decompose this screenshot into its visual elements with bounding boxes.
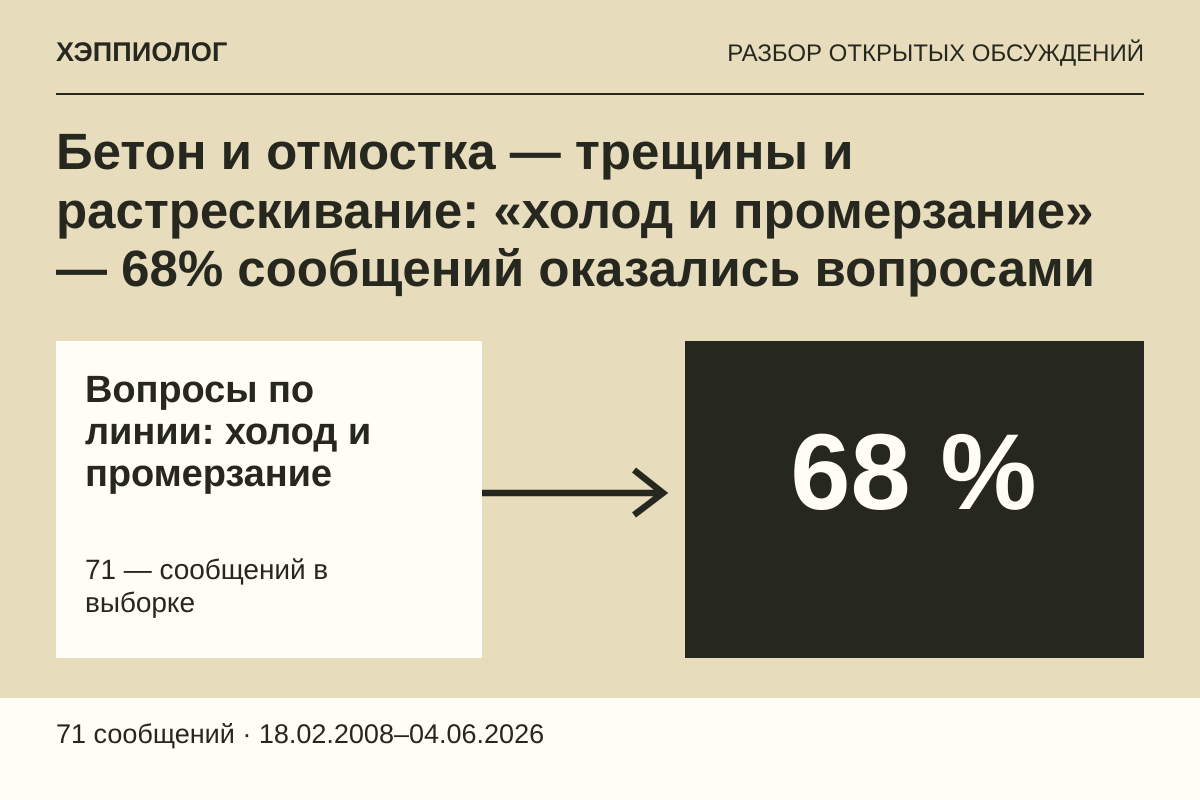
card heading xyxy=(85,369,371,495)
big number: 68 % xyxy=(790,411,1037,532)
title: Бетон и отмостка — трещины и xyxy=(56,123,853,180)
card heading: линии: холод и xyxy=(85,411,371,453)
header caption: РАЗБОР ОТКРЫТЫХ ОБСУЖДЕНИЙ xyxy=(727,40,1144,67)
footer text: 71 сообщений · 18.02.2008–04.06.2026 xyxy=(56,719,544,749)
card sample size note xyxy=(85,554,328,618)
card heading: Вопросы по xyxy=(85,369,314,411)
card heading: промерзание xyxy=(85,453,332,495)
panel: result 68% xyxy=(685,341,1144,658)
title: растрескивание: «холод и промерзание» xyxy=(56,182,1093,238)
card sample size note: выборке xyxy=(85,587,195,618)
title xyxy=(56,123,1095,297)
panel: question card xyxy=(56,341,482,658)
title: — 68% сообщений оказались вопросами xyxy=(56,240,1095,297)
header brand: ХЭППИОЛОГ xyxy=(56,37,227,67)
card sample size note: 71 — сообщений в xyxy=(85,554,328,585)
footer band xyxy=(0,698,1200,800)
arrow xyxy=(482,468,668,518)
